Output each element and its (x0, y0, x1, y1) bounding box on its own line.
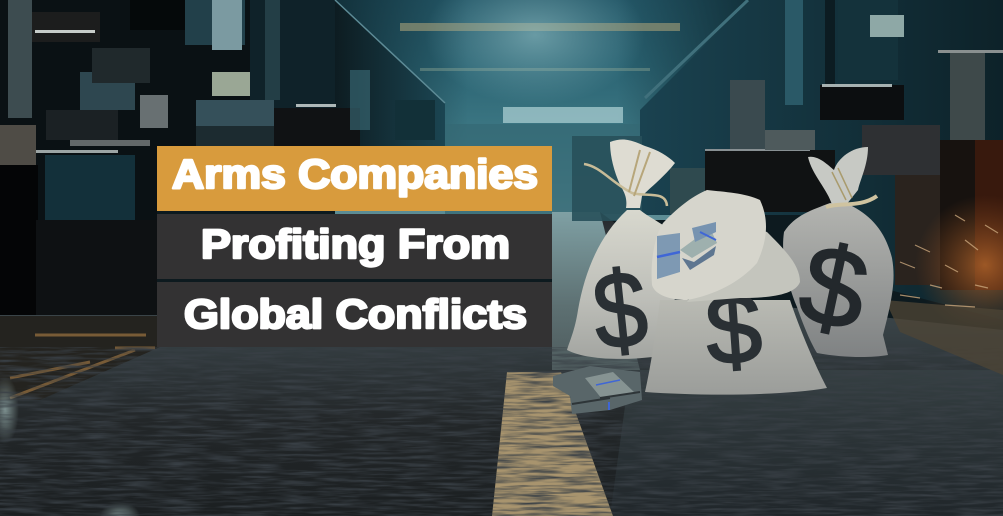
cash stacks on floor (553, 366, 642, 414)
heading line 3: Global Conflicts (184, 291, 527, 337)
money bag: left (567, 139, 685, 373)
heading line 1: Arms Companies (172, 151, 538, 197)
heading line 2: Profiting From (201, 221, 510, 267)
right machinery (572, 0, 1003, 335)
floor (0, 212, 1003, 516)
left machinery (0, 0, 445, 315)
yellow road line (492, 372, 613, 516)
title bar: dark 2 (157, 282, 552, 347)
dollar sign: $ (588, 247, 653, 373)
money bag: right (783, 147, 894, 357)
title bar: dark 1 (157, 214, 552, 279)
dollar sign: $ (790, 220, 878, 355)
sparks and lit floor (885, 215, 1003, 375)
floor streak texture (0, 347, 1003, 516)
cash in bag (657, 222, 717, 279)
dollar sign: $ (702, 271, 765, 387)
money bag: front (645, 190, 827, 395)
title bar: orange (157, 146, 552, 211)
